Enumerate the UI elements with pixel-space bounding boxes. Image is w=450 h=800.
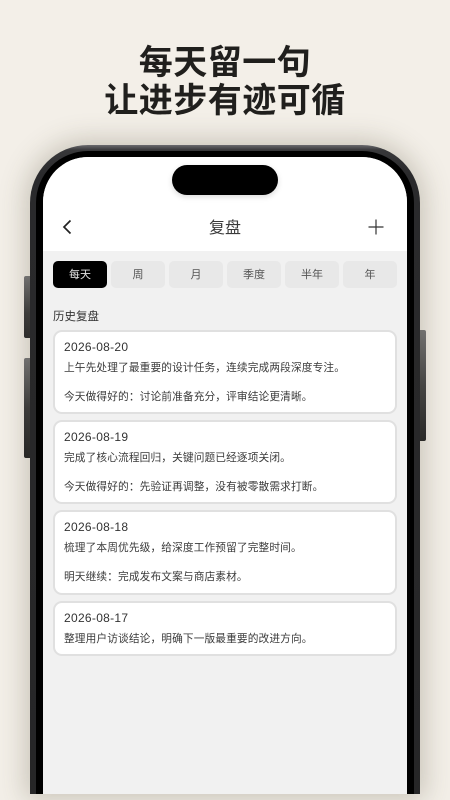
title: 每天留一句 — [139, 44, 311, 82]
app header background — [43, 157, 407, 251]
tab: year: 年 — [364, 269, 376, 281]
phone bezel — [36, 151, 414, 794]
reflection text: 今天做得好的：讨论前准备充分，评审结论更清晰。 — [64, 391, 313, 403]
entry text: 完成了核心流程回归，关键问题已经逐项关闭。 — [64, 452, 291, 464]
entry text: 整理用户访谈结论，明确下一版最重要的改进方向。 — [64, 633, 313, 645]
tab: month: 月 — [190, 269, 202, 281]
tab: quarter: 季度 — [243, 269, 265, 281]
phone side button: lower left — [24, 358, 31, 458]
tab: year — [343, 261, 397, 288]
date: 2026-08-20 — [64, 340, 128, 354]
tab: quarter — [227, 261, 281, 288]
phone screen — [43, 157, 407, 794]
next step text: 明天继续：完成发布文案与商店素材。 — [64, 571, 248, 583]
date: 2026-08-19 — [64, 430, 128, 444]
section heading: 历史复盘 — [53, 311, 99, 323]
entry text: 上午先处理了最重要的设计任务，连续完成两段深度专注。 — [64, 362, 345, 374]
entry text: 梳理了本周优先级，给深度工作预留了完整时间。 — [64, 542, 302, 554]
card: 2026-08-19 — [53, 420, 397, 504]
title: 让进步有迹可循 — [104, 82, 346, 120]
dynamic island — [172, 165, 278, 195]
icon: back arrow — [62, 220, 71, 234]
icon: add — [368, 220, 384, 234]
card: 2026-08-20 — [53, 330, 397, 414]
phone side button: right — [419, 330, 426, 441]
tab: half year — [285, 261, 339, 288]
date: 2026-08-17 — [64, 611, 128, 625]
phone side button: upper left — [24, 276, 31, 338]
tab: daily, selected — [53, 261, 107, 288]
tab: daily, selected: 每天 — [69, 269, 91, 281]
tab: week: 周 — [132, 269, 144, 281]
tab: half year: 半年 — [301, 269, 323, 281]
date: 2026-08-18 — [64, 520, 128, 534]
page title: 复盘 — [209, 220, 241, 237]
title — [104, 44, 346, 120]
reflection text: 今天做得好的：先验证再调整，没有被零散需求打断。 — [64, 481, 323, 493]
card: 2026-08-17 — [53, 601, 397, 656]
tab: month — [169, 261, 223, 288]
tab: week — [111, 261, 165, 288]
phone frame — [30, 145, 420, 794]
card: 2026-08-18 — [53, 510, 397, 595]
